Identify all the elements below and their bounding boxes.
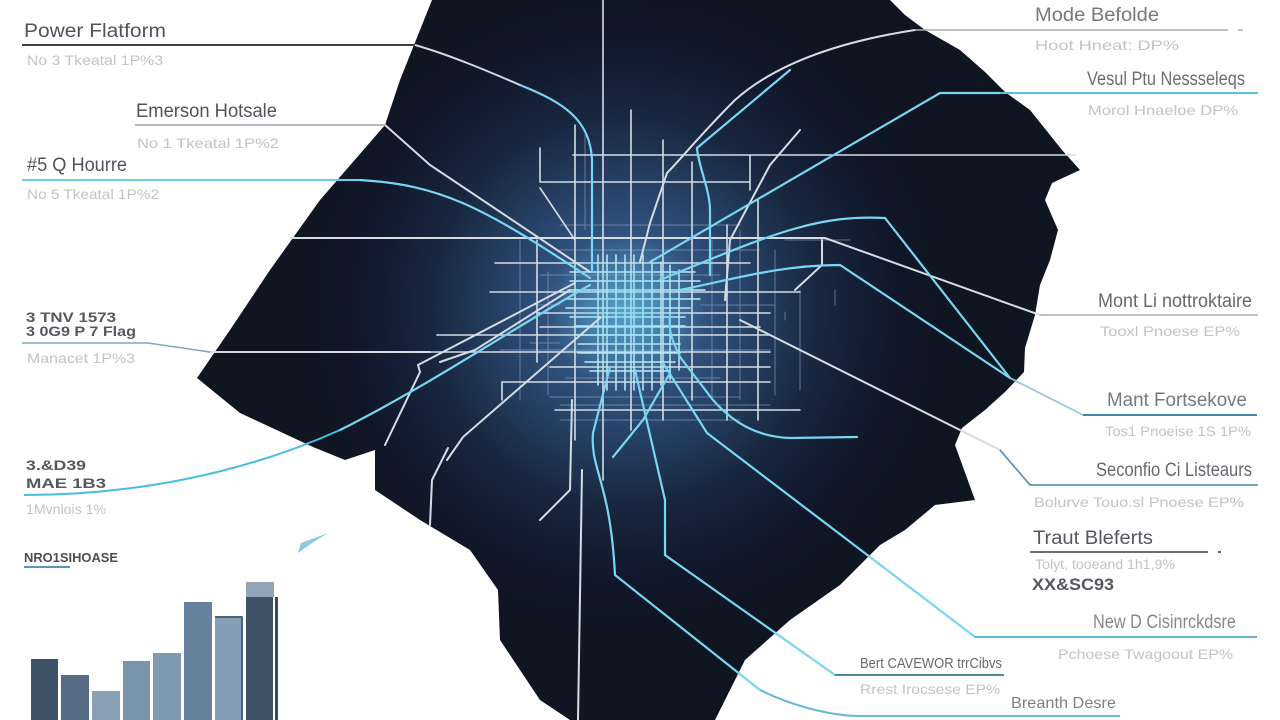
outer grid lines [430, 0, 1075, 480]
bar chart [24, 550, 278, 720]
callout: left middle: Manacet 1P%3 [27, 350, 135, 366]
callout: mant [1105, 390, 1251, 439]
leader: seconfio [1000, 450, 1258, 485]
callout: mode befolde [1035, 5, 1179, 53]
leader: emerson hotsale [135, 124, 385, 126]
callout: breanth: Breanth Desre [1011, 695, 1116, 712]
callout: bert [860, 655, 1002, 697]
callout: left middle [26, 309, 136, 366]
callout: new d: New D Cisinrckdsre [1093, 612, 1236, 633]
chart heading: NRO1SIHOASE [24, 550, 118, 565]
callout: mont: Mont Li nottroktaire [1098, 291, 1252, 312]
callout: emerson hotsale: Emerson Hotsale [136, 101, 277, 122]
callout: mant: Mant Fortsekove [1107, 390, 1247, 411]
icon: blue sliver arrow [298, 533, 328, 553]
callout: left lower [26, 457, 106, 517]
callout: seconfio: Bolurve Touo.sl Pnoese EP% [1034, 494, 1244, 510]
leader: power platform [22, 44, 415, 46]
leader: breanth [760, 690, 1120, 716]
callout: emerson hotsale [136, 101, 279, 151]
callout: left lower: 3.&D39 [26, 457, 86, 473]
leader: mant horizontal [1083, 414, 1257, 416]
callout: power platform [24, 21, 166, 68]
callout: traut: Traut Bleferts [1033, 528, 1153, 549]
callout: mont: Tooxl Pnoese EP% [1100, 323, 1240, 339]
grey routes [208, 30, 1040, 720]
core glow [548, 232, 708, 392]
bars [31, 582, 278, 720]
callout: hourre [27, 155, 159, 202]
blue routes [340, 70, 1010, 690]
dense core grid [566, 255, 705, 390]
leader: mant diagonal [1010, 378, 1083, 415]
leader: hourre [22, 179, 360, 181]
callout: traut [1032, 528, 1175, 594]
leader: bert [835, 674, 1004, 676]
callout: vesul: Vesul Ptu Nessseleqs [1087, 69, 1245, 90]
leader: mode befolde [915, 29, 1243, 31]
callout: bert: Bert CAVEWOR trrCibvs [860, 655, 1002, 672]
callout: traut: Tolyt, tooeand 1h1,9% [1035, 556, 1175, 572]
callout: mode befolde: Hoot Hneat: DP% [1035, 37, 1179, 53]
callout: left middle: 3 TNV 1573 [26, 309, 116, 325]
leader: power platform curve [415, 45, 520, 85]
callout: mant: Tos1 Pnoeise 1S 1P% [1105, 423, 1251, 439]
city grid network [208, 0, 1075, 720]
leader: vesul [1000, 92, 1258, 94]
callout: power platform: No 3 Tkeatal 1P%3 [27, 52, 163, 68]
callout: emerson hotsale: No 1 Tkeatal 1P%2 [137, 135, 279, 151]
leader: traut [1030, 551, 1221, 553]
callout: left lower: MAE 1B3 [26, 475, 106, 491]
map silhouette [197, 0, 1080, 720]
callout: new d: Pchoese Twagoout EP% [1058, 646, 1233, 662]
callout: bert: Rrest Irocsese EP% [860, 681, 1000, 697]
leader: mont [1040, 314, 1258, 316]
leader: new d [975, 636, 1257, 638]
callout: hourre: No 5 Tkeatal 1P%2 [27, 186, 159, 202]
callout: mode befolde: Mode Befolde [1035, 5, 1159, 26]
callout: hourre: #5 Q Hourre [27, 155, 127, 176]
leader: left lower [24, 430, 340, 495]
callout: power platform: Power Flatform [24, 21, 166, 42]
callout: mont [1098, 291, 1252, 339]
callout: vesul [1087, 69, 1245, 118]
callout: new d [1058, 612, 1236, 662]
callout: left lower: 1Mvnlois 1% [26, 501, 106, 517]
callout: vesul: Morol Hnaeloe DP% [1088, 102, 1238, 118]
leader: left middle [22, 343, 210, 352]
callout: traut: XX&SC93 [1032, 575, 1114, 594]
faint grid lines [460, 135, 850, 420]
callout: left middle: 3 0G9 P 7 Flag [26, 323, 136, 339]
callout: seconfio [1034, 460, 1252, 510]
callout: seconfio: Seconfio Ci Listeaurs [1096, 460, 1252, 481]
